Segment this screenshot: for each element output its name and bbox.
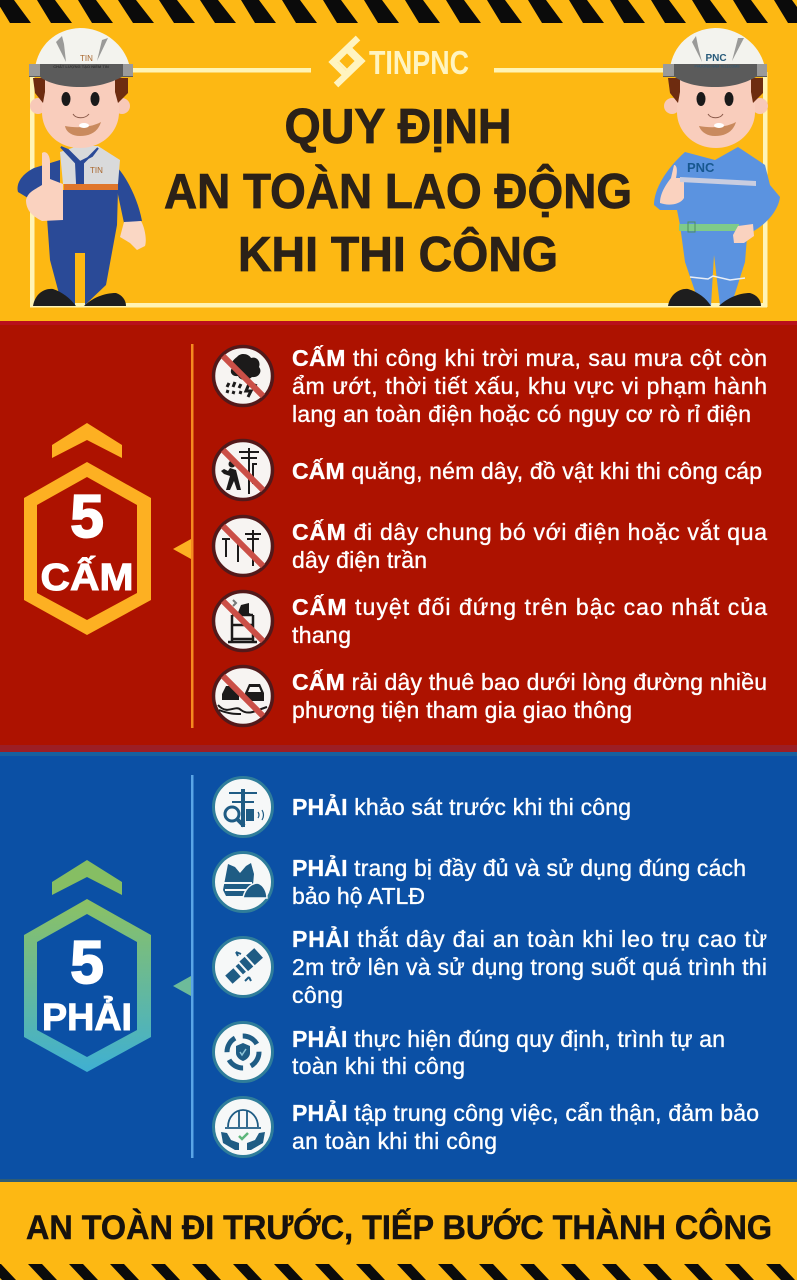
- rule text 5: an toàn khi thi công: [292, 1128, 497, 1154]
- panel bottom edge: [0, 1179, 797, 1182]
- character: PNC worker: [654, 28, 780, 306]
- chevron: [52, 860, 122, 895]
- badge number: 5: [70, 483, 104, 550]
- timeline line: [191, 344, 194, 728]
- hand on belt: [733, 224, 754, 243]
- mouth: [65, 122, 101, 136]
- icon: protective gear: [214, 852, 272, 912]
- icon: no laying cable on busy road: [214, 666, 272, 726]
- badge label: CẤM: [40, 555, 134, 599]
- helmet: [670, 28, 765, 68]
- badge number: 5: [70, 929, 104, 996]
- rule text 3: dây điện trần: [292, 547, 427, 573]
- collar: [61, 147, 98, 183]
- rule text 3: [292, 924, 767, 1008]
- panel: 5 PHẢI: [0, 752, 797, 1182]
- icon: no throwing wire: [214, 440, 272, 500]
- rule text 3: CẤM đi dây chung bó với điện hoặc vắt qua: [292, 518, 767, 545]
- rule text 2: PHẢI trang bị đầy đủ và sử dụng đúng cách: [292, 853, 746, 881]
- rule text 2: CẤM quăng, ném dây, đồ vật khi thi công cáp: [292, 457, 762, 484]
- rule text 4: [292, 593, 767, 648]
- thumbs up hand: [26, 152, 63, 221]
- legs: [680, 225, 748, 306]
- face and ears: [30, 98, 46, 114]
- rule text 4: thang: [292, 622, 351, 648]
- panel top edge: [0, 321, 797, 325]
- helmet logo: TIN: [80, 54, 93, 63]
- rule text 4: toàn khi thi công: [292, 1053, 465, 1079]
- title: [164, 100, 632, 282]
- chest strip: [680, 177, 756, 186]
- rule text 2: bảo hộ ATLĐ: [292, 883, 425, 909]
- rule text 5: [292, 1098, 759, 1154]
- hexagon badge: [24, 899, 151, 1072]
- torso shirt: [60, 146, 120, 184]
- belt: [679, 224, 739, 231]
- helmet slogan: CHẤT LƯỢNG TẠO NIỀM TIN: [53, 64, 109, 69]
- rule text 3: 2m trở lên và sử dụng trong suốt quá trình thi: [292, 954, 767, 980]
- helmet slogan: PHƯƠNG NAM TELECOMS: [694, 64, 740, 68]
- rule text 4: PHẢI thực hiện đúng quy định, trình tự an: [292, 1024, 725, 1052]
- title: AN TOÀN LAO ĐỘNG: [164, 164, 632, 219]
- footer panel: [0, 1182, 797, 1280]
- icon: no shared bundle with power: [214, 516, 272, 576]
- right hand: [120, 221, 146, 250]
- panel: 5 CẤM: [0, 321, 797, 752]
- eyes: [62, 92, 70, 106]
- left arm: [18, 160, 60, 198]
- rule text 3: công: [292, 982, 343, 1008]
- character: TIN worker: [18, 28, 146, 306]
- rule text 1: lang an toàn điện hoặc có nguy cơ rò rỉ điện: [292, 401, 751, 427]
- footer slogan: AN TOÀN ĐI TRƯỚC, TIẾP BƯỚC THÀNH CÔNG: [26, 1208, 772, 1247]
- rule text 3: [292, 518, 767, 573]
- icon: procedure cycle with shield: [214, 1022, 272, 1082]
- rule text 1: [292, 344, 767, 427]
- icon: helmet in hands: [214, 1098, 272, 1156]
- helmet: [35, 28, 130, 68]
- logo text: TINPNC: [369, 44, 469, 81]
- trouser trim: [690, 276, 745, 280]
- shoes: [668, 289, 711, 306]
- hair: [668, 78, 680, 103]
- icon: no standing on top ladder step: [214, 592, 272, 650]
- title: KHI THI CÔNG: [238, 227, 558, 282]
- logo TINPNC: [333, 38, 469, 85]
- bottom hazard stripes: [0, 1264, 795, 1280]
- nose: [708, 114, 723, 118]
- nose: [73, 114, 89, 118]
- rule text 5: CẤM rải dây thuê bao dưới lòng đường nhiều: [292, 668, 767, 695]
- timeline line: [191, 775, 194, 1158]
- torso: [654, 147, 780, 232]
- chevron: [52, 423, 122, 458]
- badge label: PHẢI: [42, 995, 132, 1039]
- rule text 5: phương tiện tham gia giao thông: [292, 697, 632, 723]
- face and ears: [664, 98, 680, 114]
- thumbs up hand: [660, 165, 684, 205]
- rule text 1: ẩm ướt, thời tiết xấu, khu vực vi phạm hành: [292, 373, 767, 399]
- rule text 4: CẤM tuyệt đối đứng trên bậc cao nhất của: [292, 593, 767, 620]
- rule text 2: [292, 853, 746, 909]
- rule text 3: PHẢI thắt dây đai an toàn khi leo trụ cao từ: [292, 924, 767, 952]
- right arm: [117, 168, 142, 223]
- icon: safety belt: [214, 938, 272, 996]
- header frame: [30, 68, 768, 308]
- hair: [33, 78, 45, 103]
- timeline pointer: [173, 539, 191, 559]
- icon: survey: [214, 778, 272, 836]
- legs and trousers: [45, 190, 118, 305]
- timeline pointer: [173, 976, 191, 996]
- mouth: [699, 122, 736, 136]
- panel background: [0, 752, 797, 1182]
- hexagon badge: [24, 462, 151, 635]
- eyes: [696, 92, 706, 106]
- panel bottom edge: [0, 745, 797, 752]
- helmet logo: PNC: [705, 53, 727, 64]
- panel top edge: [0, 752, 797, 756]
- helmet brim: [29, 64, 133, 87]
- rule text 4: [292, 1024, 725, 1079]
- rule text 1: CẤM thi công khi trời mưa, sau mưa cột còn: [292, 344, 767, 371]
- shirt band: [64, 184, 118, 190]
- icon: no working in storm: [214, 346, 272, 406]
- shirt logo: TIN: [90, 166, 103, 175]
- top hazard stripes: [0, 0, 797, 23]
- helmet brim: [663, 64, 767, 87]
- rule text 5: [292, 668, 767, 723]
- footer background: [0, 1182, 797, 1280]
- shoes: [33, 289, 76, 306]
- rule text 1: PHẢI khảo sát trước khi thi công: [292, 792, 631, 820]
- panel background: [0, 321, 797, 752]
- logo mark: [333, 38, 361, 85]
- title: QUY ĐỊNH: [284, 100, 512, 154]
- header panel background: [0, 0, 797, 322]
- chest logo: PNC: [687, 160, 715, 175]
- rule text 5: PHẢI tập trung công việc, cẩn thận, đảm bảo: [292, 1098, 759, 1126]
